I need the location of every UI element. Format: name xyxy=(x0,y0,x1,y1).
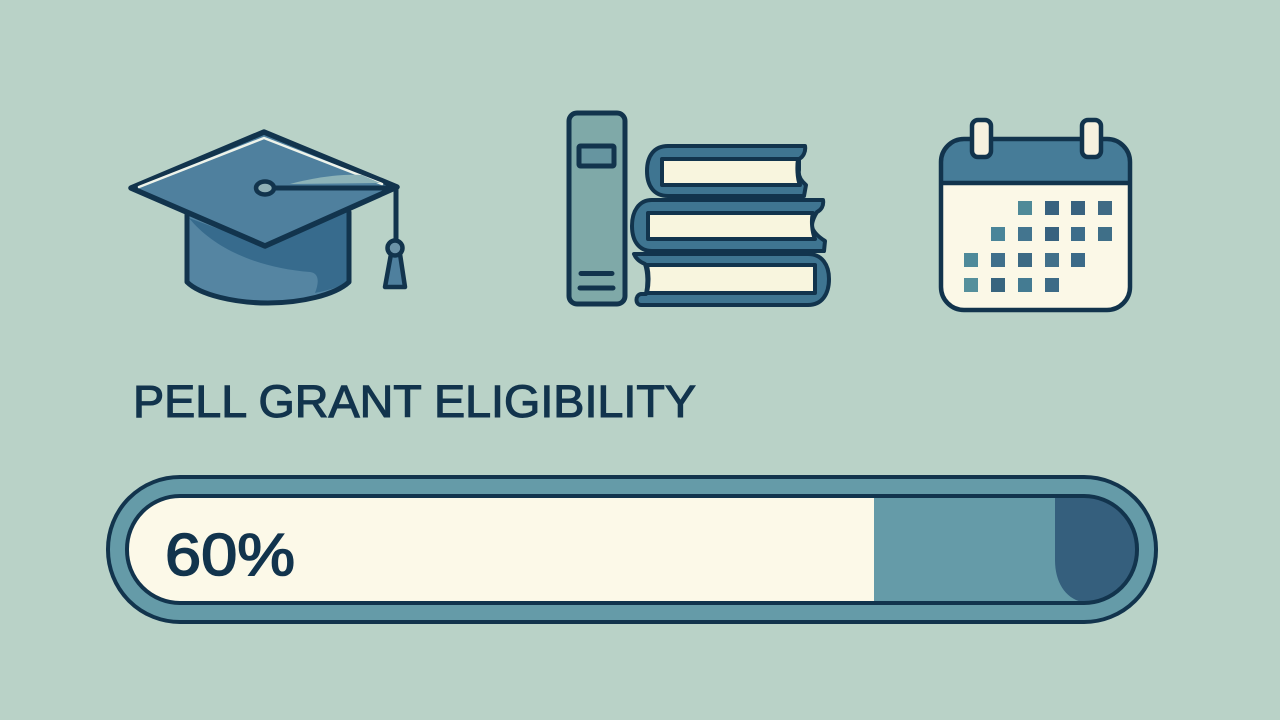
icon: calendar xyxy=(941,120,1130,310)
bottom book xyxy=(634,254,829,305)
calendar header xyxy=(941,139,1130,183)
icon: stack of books xyxy=(569,113,829,305)
date squares xyxy=(964,201,1112,292)
middle book xyxy=(632,200,825,251)
cap base xyxy=(187,212,349,303)
heading: PELL GRANT ELIGIBILITY xyxy=(133,376,696,427)
percentage label: 60% xyxy=(165,522,295,588)
progress bar xyxy=(108,477,1156,622)
upright book xyxy=(569,113,625,304)
icon: graduation cap xyxy=(131,132,405,303)
mortarboard xyxy=(131,132,397,246)
bar outer track xyxy=(108,477,1156,622)
binder rings xyxy=(972,120,1101,157)
bar end cap xyxy=(1055,497,1136,602)
calendar page xyxy=(941,139,1130,310)
tassel xyxy=(385,187,405,287)
bar filled segment xyxy=(128,497,874,602)
bar unfilled segment xyxy=(127,496,1137,603)
top book xyxy=(647,146,806,196)
